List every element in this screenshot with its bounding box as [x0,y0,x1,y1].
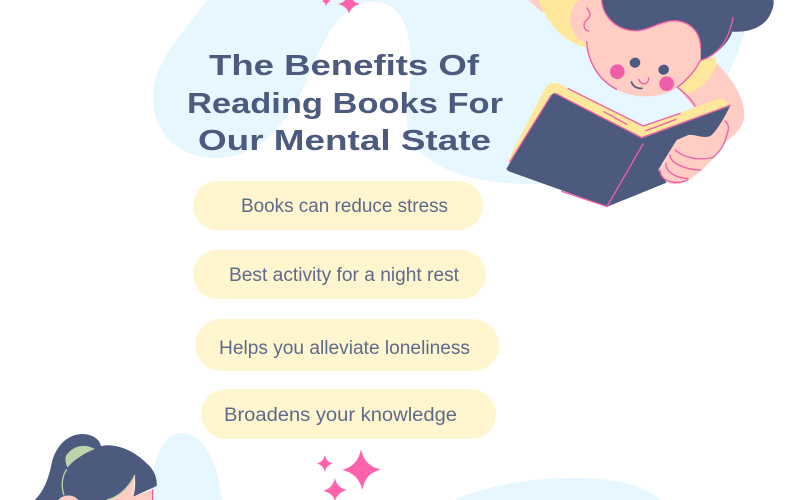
illustration: girl with ponytail [35,434,157,500]
benefit pill: loneliness: Helps you alleviate loneliness [219,338,470,359]
illustration: child reading a book [507,0,774,207]
title: Our Mental State [198,125,491,157]
title [187,50,503,157]
benefit pill: reduce stress [193,181,483,230]
benefit pill: loneliness [195,319,499,371]
title: Reading Books For [187,88,503,120]
background blob: bottom right [453,478,660,500]
benefit pill: knowledge [201,389,496,439]
title: The Benefits Of [209,50,479,82]
background blob: top [153,0,747,184]
benefit pill: reduce stress: Books can reduce stress [241,196,448,217]
cheeks and face [610,56,674,91]
benefit pill: knowledge: Broadens your knowledge [224,405,457,426]
background blob: bottom left [151,433,222,500]
sparkles: bottom [317,449,381,500]
benefit pill: night rest: Best activity for a night rest [229,265,460,286]
sparkles: top [322,0,360,14]
benefit pill: night rest [193,250,486,299]
